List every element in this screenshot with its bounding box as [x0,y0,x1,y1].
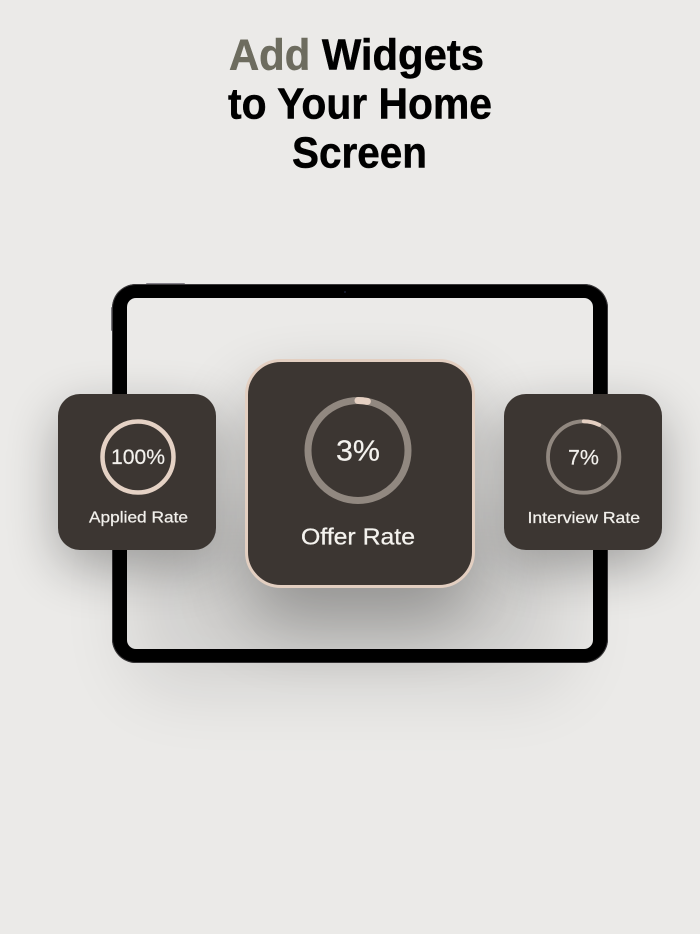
label: Offer Rate [301,524,415,550]
camera dot [344,291,346,293]
panel: interview rate widget [504,394,662,550]
track ring [308,400,408,500]
value: 7% [568,446,599,470]
progress ring [102,422,174,492]
tablet screen [127,298,593,649]
tablet side button [111,307,113,331]
tablet body [112,284,608,663]
title: Add Widgets [229,30,484,80]
tablet device frame [111,283,608,663]
value: 3% [336,436,380,468]
track ring [548,421,619,493]
progress arc [584,421,599,425]
title: to Your Home [228,80,492,128]
panel: applied rate widget [58,394,216,550]
title: Screen [292,128,427,178]
value: 100% [111,446,165,469]
tablet top buttons [146,283,185,285]
label: Applied Rate [89,510,188,526]
label: Interview Rate [528,510,640,527]
panel: offer rate widget [245,359,475,588]
progress arc [358,397,367,405]
title [228,30,492,178]
